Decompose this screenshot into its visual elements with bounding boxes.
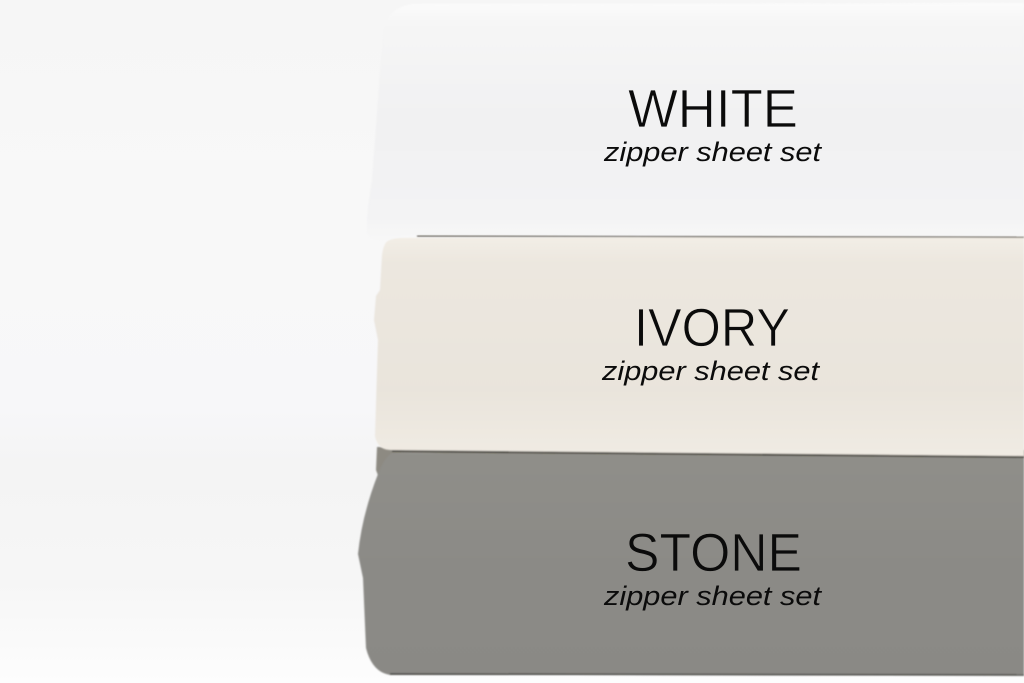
label: ivory: IVORY xyxy=(634,298,790,358)
panel: ivory sheet xyxy=(374,236,1024,457)
label: white: zipper sheet set xyxy=(603,137,823,167)
label: stone: STONE xyxy=(625,523,802,583)
label: white xyxy=(603,79,823,167)
label: ivory xyxy=(601,298,821,386)
label: stone: zipper sheet set xyxy=(603,581,823,611)
label: stone xyxy=(603,523,823,611)
label: ivory: zipper sheet set xyxy=(601,356,821,386)
panel: stone sheet xyxy=(358,447,1024,675)
label: white: WHITE xyxy=(628,79,798,139)
panel: white sheet xyxy=(367,3,1024,242)
